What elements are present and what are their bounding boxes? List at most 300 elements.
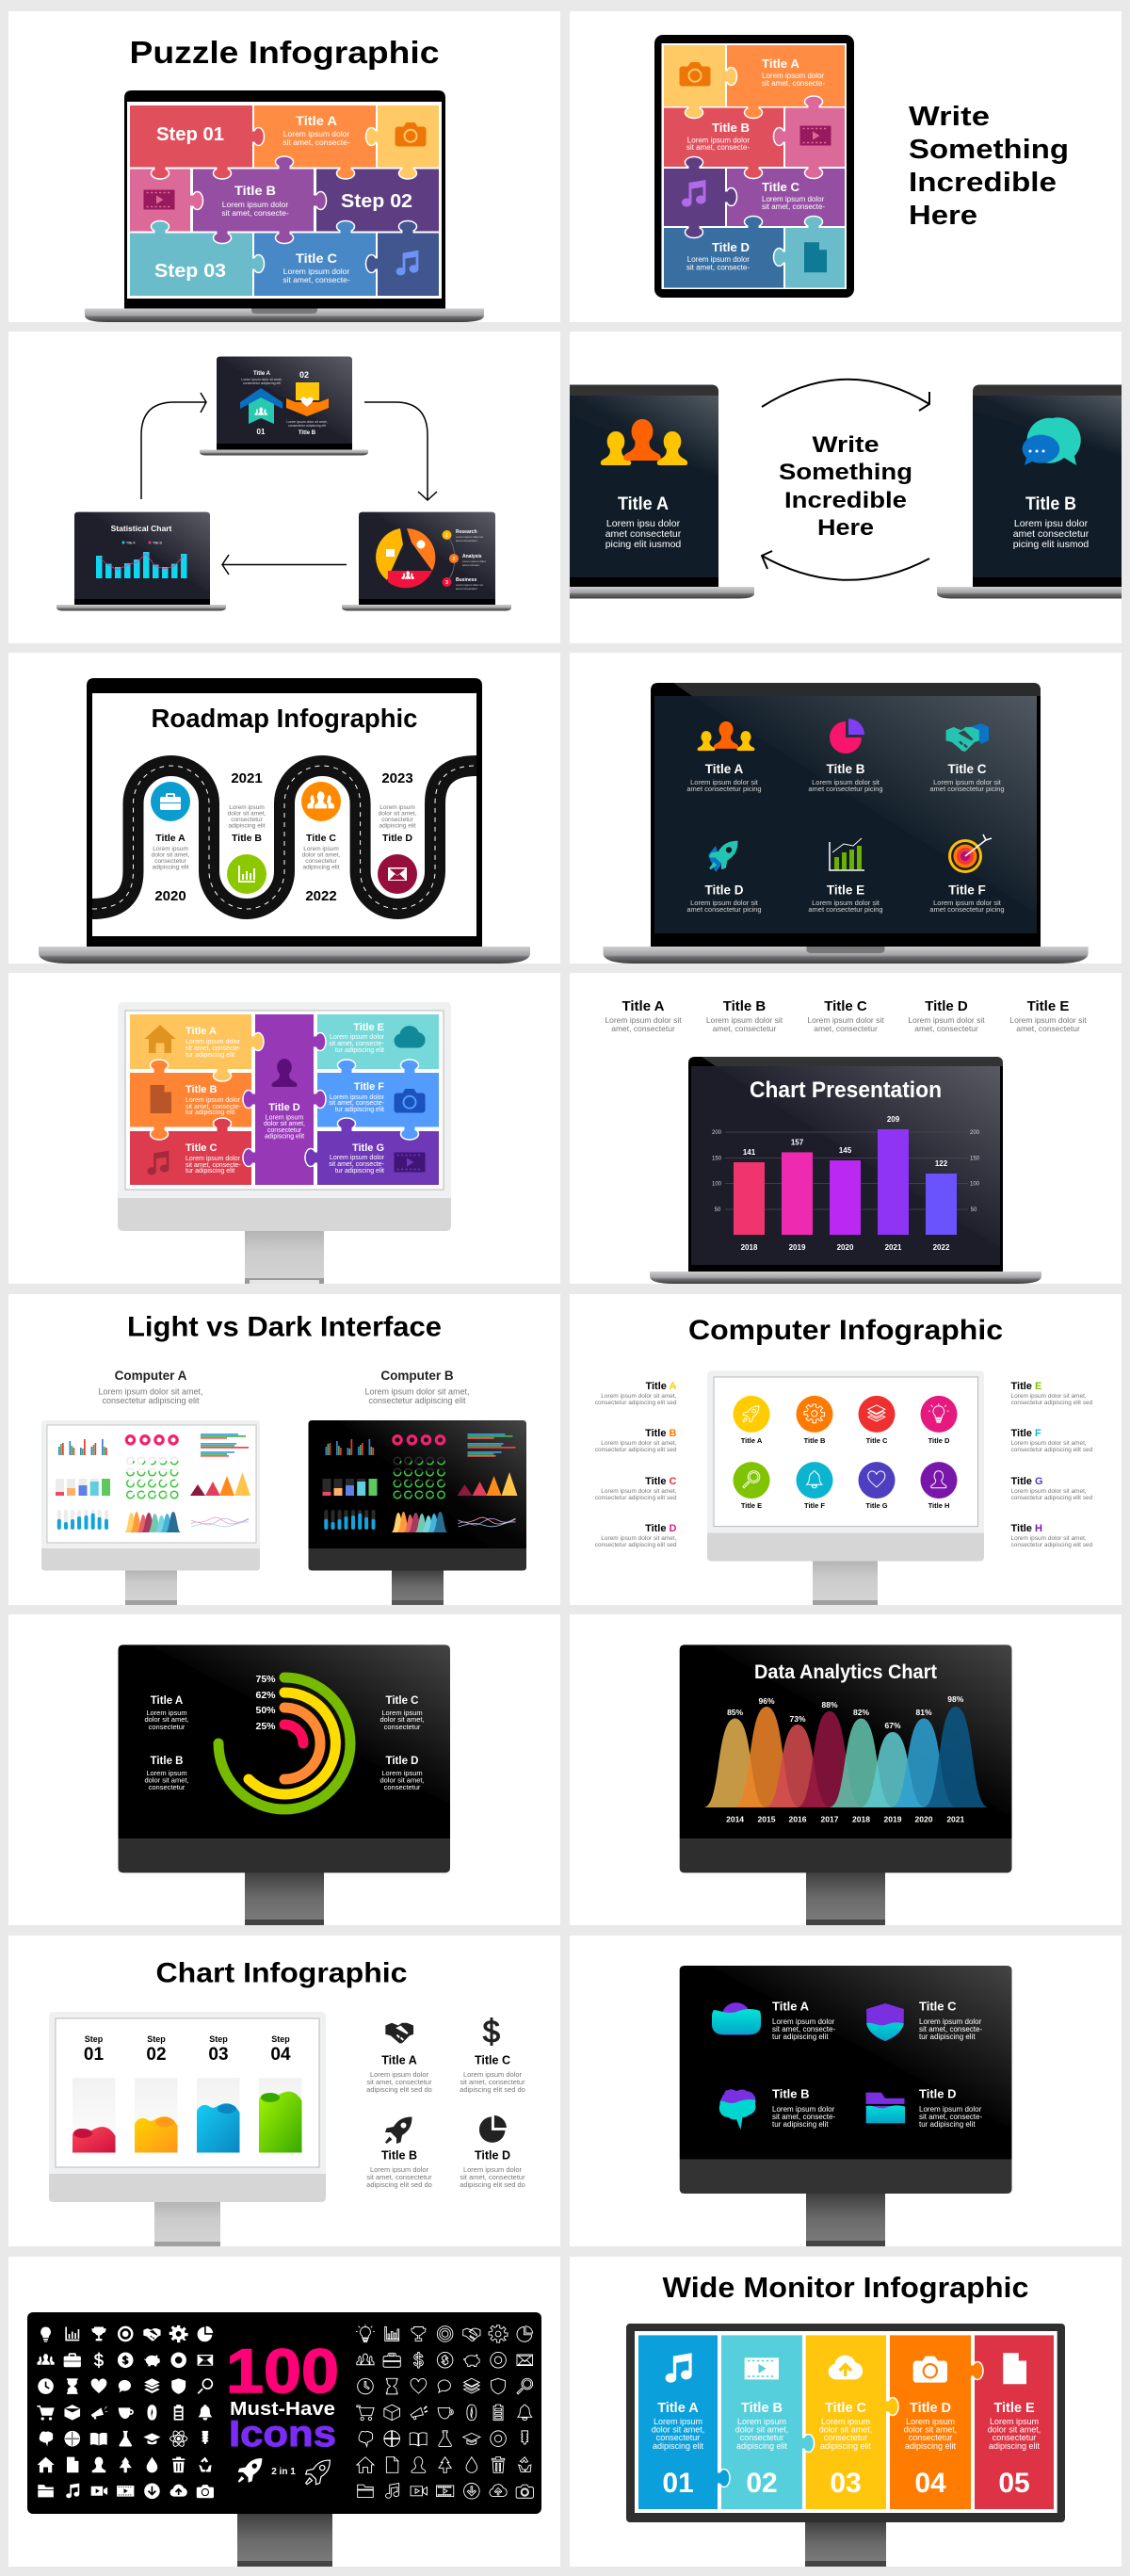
radial captions: dolor sit amet,: [379, 1776, 425, 1784]
mountain labels: 81%: [915, 1708, 932, 1717]
laptop: top with arrows: consectetur adipiscing elit: [243, 381, 281, 385]
step bars: 03: [208, 2045, 229, 2065]
monitor: dolor sit amet,: [652, 2424, 704, 2434]
laptop: circular diagram: [342, 512, 511, 610]
top captions: amet, consectetur: [713, 1024, 776, 1033]
laptop with puzzle screen: Step 02: [341, 191, 412, 212]
icon: target: [948, 834, 992, 873]
captions: sit amet, consecte-: [919, 2025, 982, 2033]
right captions: Lorem ipsum dolor: [370, 2165, 429, 2174]
tablet: sit amet, consecte-: [686, 143, 750, 152]
top captions: Title D: [925, 998, 968, 1014]
tablet: Title C: [762, 180, 800, 194]
captions: Title C: [947, 762, 987, 776]
captions: amet consectetur picing: [808, 785, 883, 793]
roadmap stops: adipiscing elit: [379, 823, 416, 829]
roadmap stops: adipiscing elit: [302, 865, 340, 870]
monitor: Title C: [825, 2401, 867, 2416]
captions: amet consectetur picing: [808, 905, 883, 914]
panel: two cropped laptops with circular arrows: [570, 332, 1122, 643]
panel: chart presentation on laptop: [570, 973, 1122, 1284]
left labels: [595, 1381, 677, 1548]
captions: Title B: [772, 2087, 810, 2100]
monitor: adipiscing elit: [265, 1134, 304, 1140]
stand: [154, 2202, 220, 2246]
iMac: light dashboard: [41, 1420, 260, 1605]
panel: computer infographic: [570, 1294, 1122, 1605]
radial captions: consectetur: [149, 1723, 186, 1731]
mountain labels: 98%: [947, 1694, 964, 1704]
monitor: Title F: [354, 1081, 384, 1093]
laptop frame: [39, 678, 530, 964]
laptop: [650, 1057, 1041, 1284]
laptop: top with arrows: consectetur adipiscing elit: [288, 424, 326, 428]
top captions: Lorem ipsum dolor sit: [807, 1015, 884, 1025]
monitor: [680, 1966, 1011, 2194]
laptop frame: [603, 683, 1089, 964]
arrow: top laptop down to right laptop: [364, 402, 437, 500]
right captions: adipiscing elit sed do: [460, 2180, 525, 2189]
radial percent labels: 25%: [255, 1721, 276, 1732]
heading: Light vs Dark Interface: Light vs Dark Interface: [127, 1311, 442, 1343]
monitor: sit amet, consecte-: [329, 1041, 385, 1047]
right captions: Lorem ipsum dolor: [463, 2165, 523, 2174]
step bars: Step: [271, 2034, 290, 2044]
right captions: Title B: [381, 2149, 417, 2163]
monitor: [118, 1002, 451, 1231]
caption: Computer A: consectetur adipiscing elit: [102, 1396, 200, 1405]
caption: Computer A: Computer A: [115, 1369, 187, 1383]
roadmap stops: consectetur: [305, 858, 338, 865]
monitor: tur adipiscing elit: [335, 1107, 384, 1113]
panel: puzzle on tablet with headline: [570, 11, 1122, 322]
caption: Computer B: consectetur adipiscing elit: [368, 1396, 466, 1405]
headline: Write Something Incredible Here: Here: [909, 201, 977, 231]
right captions: Lorem ipsum dolor: [463, 2070, 523, 2079]
roadmap stops: [151, 770, 417, 904]
laptop: Title A: Lorem ipsu dolor: [606, 518, 681, 529]
radial captions: consectetur: [384, 1723, 421, 1731]
laptop: Title B: Title B: [1025, 494, 1076, 514]
icon circles: Title F: [804, 1501, 825, 1510]
left labels: Title B: [645, 1428, 677, 1439]
radial captions: Title B: [151, 1756, 183, 1767]
top captions: amet, consectetur: [611, 1024, 675, 1033]
headline: 100 Must-Have Icons: 100: [226, 2336, 339, 2406]
roadmap stops: 2023: [381, 770, 413, 786]
left labels: Title C: [645, 1476, 677, 1487]
monitor: consectetur: [267, 1127, 302, 1134]
tablet: Lorem ipsum dolor: [762, 72, 825, 80]
roadmap stops: Title B: [232, 833, 262, 844]
right labels: consectetur adipiscing elit sed: [1011, 1400, 1093, 1406]
captions: Lorem ipsum dolor: [772, 2017, 835, 2026]
monitor: adipiscing elit: [736, 2441, 788, 2451]
laptop: statistical chart: Statistical Chart: [111, 524, 172, 533]
heading: Roadmap Infographic: Roadmap Infographic: [151, 704, 418, 733]
laptop: circular diagram: amet consectetur: [456, 587, 477, 591]
bar chart: 2018: [741, 1243, 758, 1252]
right captions: sit amet, consectetur: [460, 2173, 525, 2181]
right labels: Title E: [1011, 1381, 1041, 1392]
captions: sit amet, consecte-: [772, 2025, 835, 2033]
right labels: consectetur adipiscing elit sed: [1011, 1447, 1093, 1453]
roadmap stops: 2022: [305, 888, 337, 904]
laptop: Title B: picing elit iusmod: [1013, 539, 1089, 550]
bar chart: 2020: [837, 1243, 854, 1252]
monitor: 03: [830, 2468, 862, 2499]
top captions: amet, consectetur: [1016, 1024, 1080, 1033]
captions: Title C: [919, 1999, 957, 2014]
left labels: Title D: [645, 1523, 677, 1534]
captions: tur adipiscing elit: [919, 2120, 976, 2129]
heading: Wide Monitor Infographic: Wide Monitor Infographic: [663, 2271, 1028, 2304]
laptop: circular diagram: Business: [456, 577, 476, 583]
laptop: circular diagram: Lorem ipsum dolor sit: [456, 583, 483, 587]
headline: Write Something Incredible Here: [909, 102, 1069, 231]
text: 2 in 1: 2 in 1: [271, 2467, 296, 2477]
monitor: consectetur: [824, 2433, 867, 2442]
monitor: dolor sit amet,: [735, 2424, 788, 2434]
radial captions: dolor sit amet,: [144, 1715, 189, 1724]
mountain labels: 2016: [789, 1814, 807, 1823]
monitor: 02: [746, 2468, 778, 2499]
icon circles: [733, 1396, 957, 1510]
tablet: Title B: [712, 121, 750, 135]
bar chart: 200: [970, 1130, 980, 1136]
panel: puzzle infographic on laptop: [8, 11, 560, 322]
monitor: dolor sit amet,: [264, 1121, 305, 1127]
laptop with puzzle screen: sit amet, consecte-: [282, 138, 350, 147]
captions: [686, 762, 1005, 914]
bar chart: 2021: [885, 1243, 902, 1252]
tablet: sit amet, consecte-: [686, 264, 750, 271]
caption: Computer B: Lorem ipsum dolor sit amet,: [364, 1386, 470, 1396]
radial captions: Title A: [151, 1695, 183, 1707]
right labels: [1011, 1381, 1093, 1548]
monitor: Lorem ipsum: [654, 2417, 702, 2426]
captions: Title F: [948, 883, 986, 897]
monitor: [707, 1370, 984, 1562]
radial captions: Title D: [386, 1756, 418, 1767]
step bars: Step: [147, 2034, 166, 2044]
tablet: sit amet, consecte-: [762, 203, 825, 211]
captions: Lorem ipsum dolor: [919, 2017, 982, 2026]
panel: data analytics chart: [570, 1614, 1122, 1925]
monitor: [49, 2012, 326, 2202]
roadmap stops: Title A: [155, 833, 186, 844]
step bars: [73, 2034, 301, 2153]
monitor: Lorem ipsum dolor: [330, 1034, 385, 1041]
laptop: Title B: [937, 384, 1122, 599]
mountain labels: 73%: [789, 1714, 806, 1724]
roadmap stops: dolor sit amet,: [228, 810, 266, 818]
bar chart: 50: [715, 1207, 721, 1213]
mountain labels: 2020: [915, 1814, 933, 1823]
panel: gradient icons on dark iMac: [570, 1936, 1122, 2246]
radial captions: dolor sit amet,: [379, 1715, 425, 1724]
left labels: Lorem ipsum dolor sit amet,: [601, 1488, 677, 1495]
stand: [806, 2194, 885, 2246]
monitor: dolor sit amet,: [904, 2424, 957, 2434]
laptop: top with arrows: [200, 356, 368, 456]
top captions: Lorem ipsum dolor sit: [706, 1015, 783, 1025]
monitor: sit amet, consecte-: [329, 1161, 385, 1168]
icon: rocket: [708, 841, 738, 872]
icon: cloud: [712, 2002, 761, 2035]
tablet: [654, 35, 854, 298]
monitor: tur adipiscing elit: [186, 1168, 234, 1175]
captions: Title D: [919, 2087, 957, 2100]
right captions: Title C: [475, 2053, 510, 2066]
laptop with puzzle screen: Step 03: [154, 261, 226, 282]
left labels: Title A: [645, 1381, 677, 1392]
monitor: dolor sit amet,: [988, 2424, 1041, 2434]
radial captions: Title C: [386, 1695, 418, 1707]
captions: tur adipiscing elit: [772, 2033, 829, 2041]
bar chart: 150: [970, 1157, 980, 1162]
headline: Write Something Incredible Here: Incredible: [784, 488, 907, 513]
top captions: Lorem ipsum dolor sit: [605, 1015, 682, 1025]
monitor: consectetur: [740, 2433, 783, 2442]
step bars: 04: [270, 2045, 291, 2065]
stand: [245, 1231, 324, 1284]
captions: Lorem ipsum dolor sit: [690, 778, 759, 786]
right captions: sit amet, consectetur: [366, 2078, 432, 2086]
right captions: sit amet, consectetur: [366, 2173, 432, 2181]
mountain labels: 2018: [852, 1814, 870, 1823]
top captions: Lorem ipsum dolor sit: [908, 1015, 985, 1025]
captions: sit amet, consecte-: [919, 2113, 982, 2121]
right labels: consectetur adipiscing elit sed: [1011, 1542, 1093, 1548]
panel: chart infographic: [8, 1936, 560, 2246]
right labels: Lorem ipsum dolor sit amet,: [1011, 1440, 1087, 1447]
headline: 100 Must-Have Icons: Icons: [229, 2414, 336, 2454]
monitor: Title A: [186, 1026, 217, 1037]
laptop: statistical chart: Title B: [153, 541, 162, 544]
laptop: circular diagram: 1: [445, 533, 448, 539]
radial percent labels: 50%: [255, 1705, 276, 1716]
right captions: sit amet, consectetur: [460, 2078, 525, 2086]
heading: Data Analytics Chart: Data Analytics Chart: [754, 1661, 937, 1683]
monitor: tur adipiscing elit: [335, 1047, 384, 1054]
laptop: top with arrows: Title A: [253, 371, 271, 377]
bar chart: 209: [887, 1115, 900, 1124]
monitor: [626, 2324, 1065, 2522]
roadmap stops: Lorem ipsum: [379, 804, 415, 811]
roadmap stops: Lorem ipsum: [229, 804, 265, 811]
monitor: tur adipiscing elit: [335, 1168, 384, 1175]
captions: Lorem ipsum dolor sit: [690, 899, 759, 907]
tablet: Lorem ipsum dolor: [687, 255, 750, 264]
panel: wide monitor infographic: [570, 2257, 1122, 2567]
headline: 100 Must-Have Icons: Must-Have: [230, 2399, 335, 2420]
mountain labels: 2014: [726, 1814, 744, 1823]
step bars: Step: [85, 2034, 104, 2044]
right labels: consectetur adipiscing elit sed: [1011, 1495, 1093, 1501]
icon circles: Title G: [865, 1501, 888, 1510]
monitor: Title D: [910, 2401, 951, 2416]
radial percent labels: 62%: [255, 1690, 276, 1701]
monitor: Title D: [268, 1102, 300, 1113]
left labels: consectetur adipiscing elit sed: [595, 1400, 677, 1406]
laptop with puzzle screen: Lorem ipsum dolor: [283, 267, 349, 276]
step bars: Step: [209, 2034, 228, 2044]
right labels: Lorem ipsum dolor sit amet,: [1011, 1393, 1087, 1400]
right captions: adipiscing elit sed do: [366, 2180, 432, 2189]
top captions: [605, 998, 1087, 1033]
left labels: consectetur adipiscing elit sed: [595, 1447, 677, 1453]
top captions: amet, consectetur: [814, 1024, 878, 1033]
bar chart: 141: [743, 1148, 756, 1157]
caption: Computer A: Lorem ipsum dolor sit amet,: [98, 1386, 203, 1396]
monitor: consectetur: [993, 2433, 1036, 2442]
laptop with puzzle screen: Lorem ipsum dolor: [283, 129, 349, 138]
captions: Lorem ipsum dolor sit: [933, 899, 1002, 907]
bar chart: [712, 1115, 980, 1252]
icon circles: Title A: [741, 1436, 763, 1445]
laptop with puzzle screen: Lorem ipsum dolor: [222, 200, 288, 209]
captions: Lorem ipsum dolor: [919, 2105, 982, 2114]
panel: 100 must-have icons: [8, 2257, 560, 2567]
laptop with puzzle screen: Title B: [234, 183, 276, 198]
left labels: consectetur adipiscing elit sed: [595, 1542, 677, 1548]
captions: Title D: [704, 883, 744, 897]
laptop: top with arrows: 01: [257, 428, 266, 436]
laptop: Title A: picing elit iusmod: [605, 539, 681, 550]
monitor: sit amet, consecte-: [186, 1104, 241, 1110]
bar chart: 200: [712, 1130, 722, 1136]
monitor: tur adipiscing elit: [186, 1052, 234, 1059]
caption: Computer A: [98, 1369, 203, 1405]
panel: radial progress on dark iMac: [8, 1614, 560, 1925]
bar chart: 2019: [789, 1243, 806, 1252]
icon: outline rocket: [306, 2460, 330, 2485]
top captions: Title A: [622, 998, 665, 1014]
captions: Title E: [827, 883, 864, 897]
laptop: top with arrows: Lorem ipsum dolor sit amet,: [241, 378, 282, 381]
bar chart: 150: [712, 1157, 722, 1162]
icon: pie: [830, 719, 864, 753]
captions: Lorem ipsum dolor sit: [933, 778, 1002, 786]
monitor: Lorem ipsum dolor: [186, 1097, 241, 1104]
right captions: Lorem ipsum dolor: [370, 2070, 429, 2079]
right labels: Title G: [1011, 1476, 1043, 1487]
radial captions: [144, 1695, 425, 1791]
monitor: adipiscing elit: [820, 2441, 872, 2451]
panel: six icons on dark laptop: [570, 653, 1122, 964]
monitor: Title E: [353, 1022, 384, 1033]
mountain labels: 88%: [821, 1700, 838, 1709]
tablet: Title D: [712, 240, 750, 254]
roadmap stops: 2020: [154, 888, 186, 904]
heading: Chart Presentation: Chart Presentation: [750, 1077, 942, 1103]
tablet: sit amet, consecte-: [762, 79, 825, 88]
laptop: circular diagram: Research: [456, 529, 477, 535]
headline: Write Something Incredible Here: [779, 432, 912, 541]
road: [92, 766, 476, 909]
monitor: [680, 1644, 1011, 1872]
laptop: statistical chart: [56, 512, 226, 610]
bar chart: 2022: [933, 1243, 950, 1252]
monitor: consectetur: [909, 2433, 952, 2442]
laptop: circular diagram: Analysis: [462, 554, 482, 559]
mountain labels: 82%: [853, 1708, 869, 1717]
monitor: adipiscing elit: [989, 2441, 1041, 2451]
headline: Write Something Incredible Here: Something: [909, 135, 1069, 165]
icon: handshake: [946, 723, 989, 752]
icon: team: [698, 721, 754, 751]
captions: Lorem ipsum dolor sit: [812, 899, 880, 907]
radial percent labels: [255, 1674, 276, 1732]
roadmap stops: adipiscing elit: [152, 865, 189, 870]
top captions: Title E: [1027, 998, 1069, 1014]
bar chart: 100: [970, 1181, 980, 1187]
monitor: sit amet, consecte-: [329, 1100, 385, 1107]
roadmap stops: dolor sit amet,: [379, 810, 417, 818]
mountain labels: 2019: [884, 1814, 902, 1823]
arrow: bottom curved arrow: [762, 551, 929, 580]
captions: amet consectetur picing: [686, 905, 762, 914]
roadmap stops: consectetur: [381, 817, 414, 823]
captions: Lorem ipsum dolor: [772, 2105, 835, 2114]
laptop: Title B: amet consectetur: [1013, 528, 1090, 540]
roadmap stops: consectetur: [154, 858, 187, 865]
icon circles: Title E: [741, 1501, 762, 1510]
roadmap stops: dolor sit amet,: [302, 851, 341, 859]
tablet: Lorem ipsum dolor: [762, 195, 825, 203]
laptop with puzzle screen: Title C: [296, 251, 337, 266]
right captions: adipiscing elit sed do: [460, 2085, 525, 2094]
radial captions: Lorem ipsum: [146, 1769, 187, 1777]
top captions: amet, consectetur: [914, 1024, 978, 1033]
captions: sit amet, consecte-: [772, 2113, 835, 2121]
iMac: dark dashboard: [309, 1420, 526, 1605]
laptop: Title A: [570, 384, 754, 599]
left labels: Lorem ipsum dolor sit amet,: [601, 1535, 677, 1542]
arrow: top curved arrow: [762, 380, 929, 411]
stand: [806, 1872, 885, 1925]
monitor: Title B: [741, 2401, 783, 2416]
laptop: top with arrows: 02: [299, 370, 309, 380]
left labels: Lorem ipsum dolor sit amet,: [601, 1393, 677, 1400]
step bars: 01: [84, 2045, 104, 2065]
bar chart: 145: [839, 1146, 852, 1155]
stand: [237, 2514, 332, 2567]
laptop: Title A: Title A: [618, 494, 669, 514]
monitor: Lorem ipsum dolor: [186, 1039, 241, 1045]
radial percent labels: 75%: [255, 1674, 276, 1685]
radial captions: dolor sit amet,: [144, 1776, 189, 1784]
roadmap stops: 2021: [231, 770, 263, 786]
left labels: Lorem ipsum dolor sit amet,: [601, 1440, 677, 1447]
laptop: top with arrows: Lorem ipsum dolor sit amet,: [286, 420, 328, 424]
icon circles: Title D: [928, 1436, 950, 1445]
monitor: Lorem ipsum: [990, 2417, 1039, 2426]
roadmap stops: consectetur: [231, 817, 264, 823]
caption: Computer B: [364, 1369, 470, 1405]
icon circles: Title H: [928, 1501, 949, 1510]
right captions: Title A: [381, 2053, 417, 2066]
bar chart: 100: [712, 1181, 722, 1187]
roadmap stops: adipiscing elit: [228, 823, 266, 829]
captions: [772, 1999, 982, 2129]
radial chart: [218, 1677, 350, 1809]
headline: Write Something Incredible Here: Write: [909, 102, 990, 132]
bar chart: 122: [935, 1159, 948, 1168]
monitor: Lorem ipsum dolor: [330, 1094, 385, 1101]
monitor: 01: [662, 2468, 694, 2499]
